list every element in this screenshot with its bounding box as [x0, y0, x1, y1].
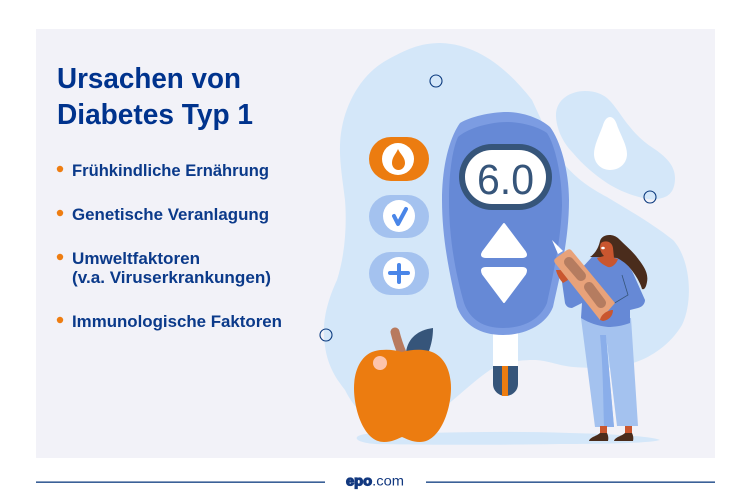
- title: Diabetes Typ 1: [57, 99, 253, 131]
- item: environment: Umweltfaktoren: [72, 250, 200, 268]
- smile: [601, 247, 605, 249]
- lancing pen: [554, 249, 615, 320]
- pen patch two: [589, 287, 601, 303]
- hair: [590, 235, 647, 289]
- icon: white drop: [594, 117, 627, 170]
- glucose meter: [442, 112, 569, 335]
- item: early nutrition: Frühkindliche Ernährung: [72, 162, 269, 180]
- supporting hand: [600, 310, 613, 321]
- person holding pen: [552, 235, 647, 441]
- decorative ring: top: [430, 75, 442, 87]
- pen hand: [556, 270, 568, 283]
- item: environment: (v.a. Viruserkrankungen): [72, 269, 271, 287]
- legs: [581, 318, 638, 427]
- apple leaf: [406, 328, 433, 352]
- footer rule left: [36, 482, 325, 483]
- sweater: [562, 257, 645, 327]
- item: environment: [57, 250, 271, 287]
- title: Ursachen von: [57, 63, 241, 95]
- ground shadow: [357, 432, 660, 445]
- head and neck: [597, 241, 618, 267]
- item: immunology: Immunologische Faktoren: [72, 313, 282, 331]
- down button: [482, 268, 526, 302]
- item: genetics: Genetische Veranlagung: [72, 206, 269, 224]
- meter body outer: [442, 112, 569, 335]
- background panel: [36, 29, 715, 458]
- icon pill: plus: [369, 252, 429, 295]
- icon pill: check mark: [369, 195, 429, 238]
- meter screen: [459, 144, 552, 210]
- icon pill: orange drop: [369, 137, 429, 181]
- title: [57, 63, 253, 131]
- meter body inner: [449, 122, 562, 328]
- decorative ring: left: [320, 329, 332, 341]
- apple highlight: [373, 356, 387, 370]
- decorative ring: right: [644, 191, 656, 203]
- apple: [354, 328, 451, 442]
- list of causes: [57, 162, 282, 331]
- small background blob: [556, 91, 675, 200]
- ankles: [600, 426, 632, 435]
- meter screen: 6.0: [477, 156, 534, 204]
- leg shade: [600, 335, 614, 427]
- lancet needle: [552, 240, 563, 254]
- apple stem: [395, 332, 402, 353]
- test strip: [493, 330, 518, 396]
- pen patch one: [569, 262, 581, 276]
- up button: [482, 224, 526, 257]
- logo: epo.com: [346, 474, 404, 488]
- sweater fold line: [613, 275, 628, 304]
- shoes: [589, 433, 633, 441]
- footer rule right: [426, 482, 715, 483]
- apple body: [354, 350, 451, 442]
- large background blob: [324, 43, 689, 424]
